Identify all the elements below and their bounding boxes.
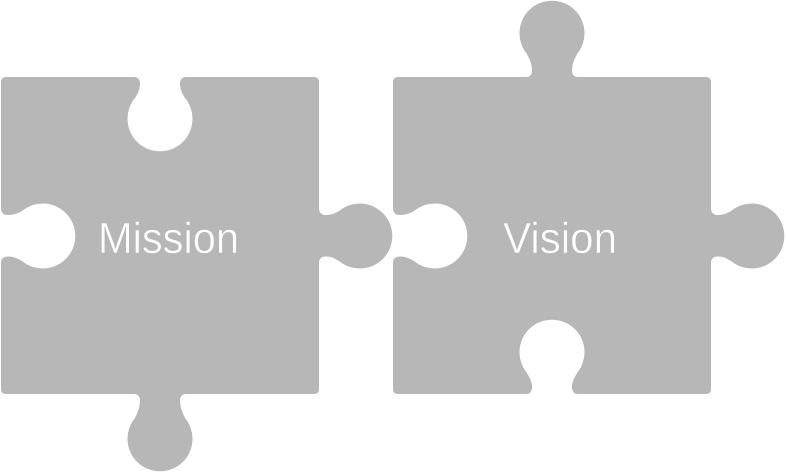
vision piece shape [393, 1, 784, 394]
vision label: Vision [503, 214, 617, 263]
mission label: Mission [98, 214, 239, 263]
mission piece shape [1, 77, 392, 471]
